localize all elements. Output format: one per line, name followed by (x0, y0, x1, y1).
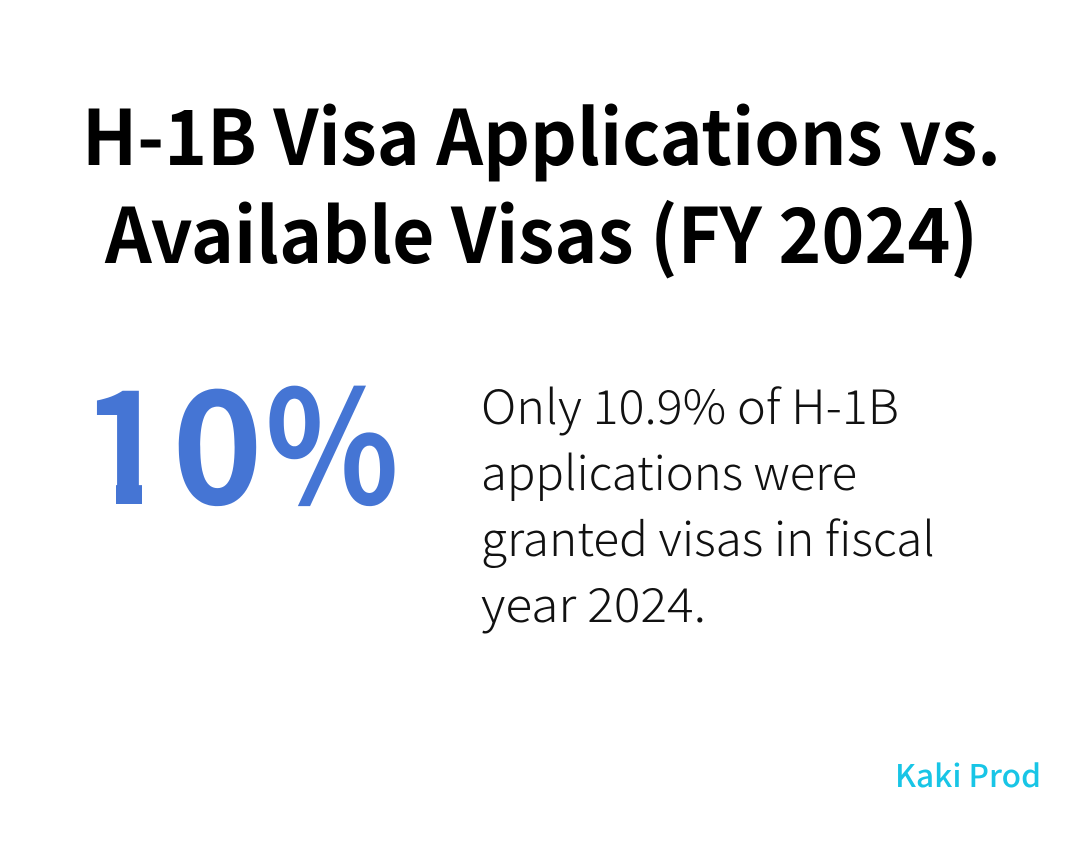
title (82, 77, 1001, 285)
big statistic: 10%: 0 (172, 323, 263, 550)
description text: granted visas in fiscal (481, 501, 935, 570)
logo: Kaki Prod: Kaki Prod (895, 751, 1041, 796)
big statistic: 10%: 1 (81, 323, 169, 550)
description text: applications were (481, 435, 857, 504)
title: H-1B Visa Applications vs. (82, 77, 1001, 187)
description text: Only 10.9% of H-1B (481, 369, 899, 438)
big statistic: 10%: % (265, 323, 399, 550)
title: Available Visas (FY 2024) (104, 175, 978, 285)
description text (481, 369, 935, 636)
big statistic: 10% (96, 386, 394, 506)
description text: year 2024. (481, 567, 706, 636)
infographic canvas (88, 104, 1038, 788)
